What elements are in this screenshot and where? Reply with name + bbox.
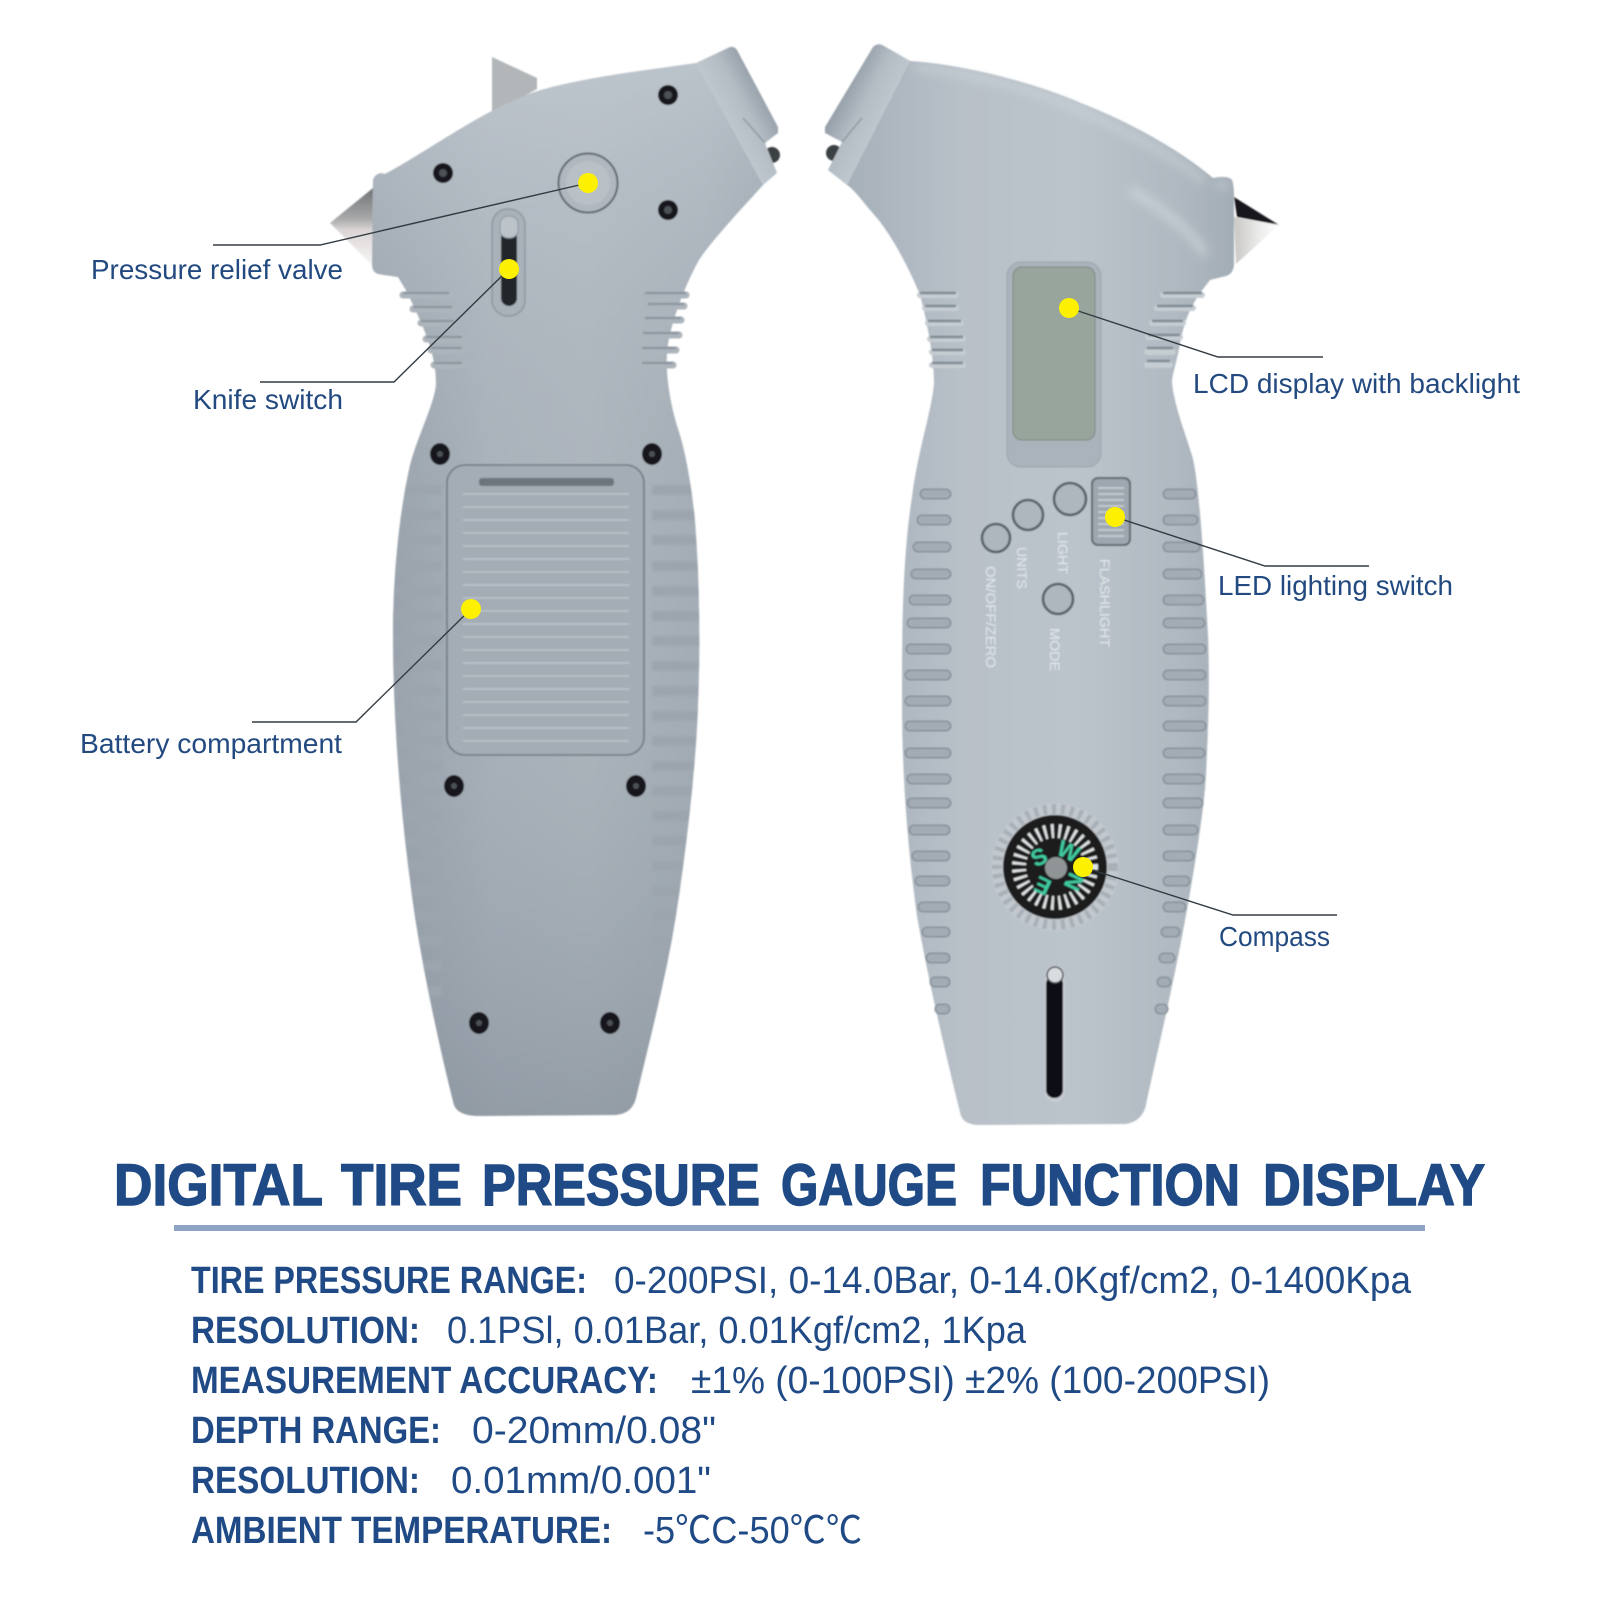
title: GAUGE — [781, 1153, 957, 1218]
spec: measurement accuracy — [191, 1360, 1270, 1402]
body highlights — [915, 68, 1226, 255]
nozzle slot — [842, 118, 862, 142]
compass: S — [1027, 842, 1051, 872]
spec: resolution depth: RESOLUTION: — [191, 1460, 420, 1502]
valve button — [558, 154, 618, 212]
battery cover — [447, 465, 644, 755]
title: DIGITAL — [114, 1153, 323, 1218]
nozzle slot — [743, 118, 765, 143]
button labels: MODE — [1047, 628, 1063, 671]
title — [114, 1153, 1485, 1218]
spec: measurement accuracy: MEASUREMENT ACCURACY: — [191, 1360, 658, 1402]
callout: compass: Compass — [1219, 921, 1330, 952]
callout: knife switch — [193, 259, 519, 415]
spec: tire pressure range — [191, 1260, 1412, 1302]
spec: resolution depth — [191, 1460, 711, 1502]
compass: N — [1059, 869, 1089, 895]
nozzle — [696, 47, 778, 185]
button labels — [983, 532, 1113, 671]
spec: ambient temperature: AMBIENT TEMPERATURE: — [191, 1510, 612, 1552]
spec: resolution pressure: 0.1PSl, 0.01Bar, 0.01Kgf/cm2, 1Kpa — [447, 1310, 1027, 1352]
compass: W — [1053, 835, 1084, 868]
spec: depth range: 0-20mm/0.08" — [472, 1410, 716, 1452]
callout: battery compartment — [80, 599, 481, 759]
upper grip ribs — [403, 293, 686, 365]
spec: tire pressure range: 0-200PSI, 0-14.0Bar, 0-14.0Kgf/cm2, 0-1400Kpa — [614, 1260, 1412, 1302]
callout: pressure relief valve — [91, 173, 598, 285]
title: PRESSURE — [482, 1153, 760, 1218]
body shading — [372, 60, 782, 1120]
title underline — [174, 1225, 1425, 1231]
spec: depth range — [191, 1410, 716, 1452]
device: back view of gauge — [330, 47, 782, 1120]
hammer tip dark side — [1234, 197, 1279, 225]
flashlight switch — [1092, 478, 1130, 545]
spec: resolution pressure — [191, 1310, 1027, 1352]
callout: LCD display — [1059, 298, 1520, 399]
grip ribs — [910, 494, 1201, 1009]
handle body — [847, 61, 1234, 1125]
steel ball — [764, 147, 780, 163]
knife blade — [492, 57, 537, 114]
compass: E — [1030, 871, 1055, 901]
spec: depth range: DEPTH RANGE: — [191, 1410, 441, 1452]
spec: ambient temperature: -5℃C-50℃℃ — [643, 1510, 862, 1552]
callout: knife switch: Knife switch — [193, 384, 343, 415]
handle body — [372, 63, 763, 1116]
spec: tire pressure range: TIRE PRESSURE RANGE: — [191, 1260, 587, 1302]
button labels: LIGHT — [1055, 532, 1071, 574]
hammer tip light side — [1234, 217, 1279, 264]
title: DISPLAY — [1263, 1153, 1485, 1218]
buttons — [982, 483, 1086, 614]
title: FUNCTION — [980, 1153, 1240, 1218]
valve inner — [566, 161, 610, 205]
spec: resolution depth: 0.01mm/0.001" — [451, 1460, 711, 1502]
LCD screen — [1013, 267, 1095, 440]
button labels: UNITS — [1014, 547, 1030, 589]
LCD bezel — [1007, 262, 1101, 467]
knife slider — [492, 209, 525, 316]
nozzle — [825, 44, 912, 185]
button labels: ON/OFF/ZERO — [983, 566, 999, 668]
title: TIRE — [341, 1153, 462, 1218]
metal hammer tip — [330, 188, 373, 265]
grip ribs — [652, 486, 700, 792]
callout: LCD display: LCD display with backlight — [1193, 368, 1520, 399]
callout: LED lighting switch: LED lighting switch — [1218, 570, 1453, 601]
spec: resolution pressure: RESOLUTION: — [191, 1310, 420, 1352]
device: front view of gauge — [825, 44, 1279, 1125]
button labels: FLASHLIGHT — [1097, 559, 1113, 647]
upper grip ribs — [920, 293, 1202, 365]
callout: pressure relief valve: Pressure relief valve — [91, 254, 343, 285]
callout: LED lighting switch — [1105, 507, 1453, 601]
screws — [430, 85, 678, 1034]
callout: battery compartment: Battery compartment — [80, 728, 342, 759]
compass — [991, 803, 1119, 931]
callout: compass — [1073, 857, 1337, 952]
steel ball — [826, 145, 842, 161]
depth slot — [1045, 965, 1065, 1102]
spec: measurement accuracy: ±1% (0-100PSI) ±2% (100-200PSI) — [691, 1360, 1270, 1402]
